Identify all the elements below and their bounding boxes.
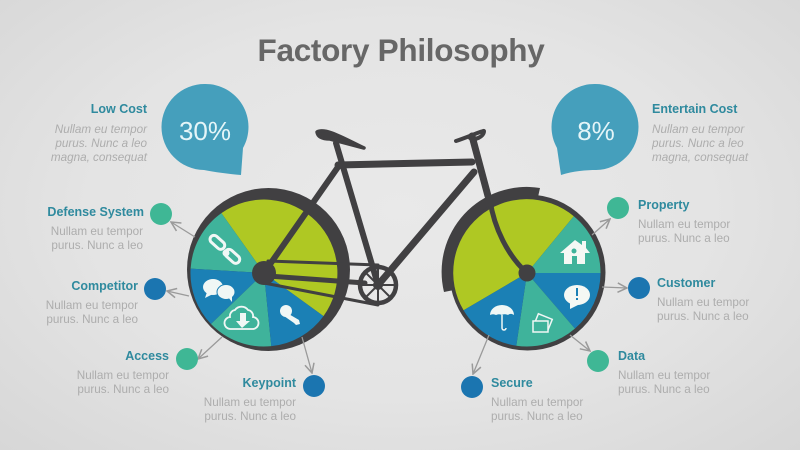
right wheel blue sector: alert bbox=[527, 273, 600, 329]
text block: keypoint: purus. Nunc a leo bbox=[204, 410, 296, 423]
text block: entertain cost: Nullam eu tempor bbox=[652, 123, 745, 136]
text block: customer: Nullam eu tempor bbox=[657, 296, 749, 309]
right hub bbox=[518, 264, 536, 282]
right wheel fender bbox=[442, 187, 540, 292]
text block: low cost bbox=[51, 102, 148, 164]
crank ring bbox=[360, 267, 396, 303]
text block: property bbox=[638, 198, 730, 245]
arrows bbox=[167, 219, 627, 374]
text block: competitor: Nullam eu tempor bbox=[46, 299, 138, 312]
text block: entertain cost: purus. Nunc a leo bbox=[651, 137, 744, 150]
icon: link bbox=[208, 234, 241, 265]
left hub bbox=[252, 261, 276, 285]
icon: cloud download bbox=[224, 307, 259, 329]
head tube and fork bbox=[472, 136, 488, 196]
text block: data bbox=[618, 349, 710, 396]
text block: entertain cost: Entertain Cost bbox=[652, 102, 738, 116]
left wheel blue sector: chat bbox=[190, 269, 264, 324]
right wheel teal sector: photos bbox=[516, 273, 575, 346]
dot: defense system bbox=[150, 203, 172, 225]
text block: competitor bbox=[46, 279, 138, 326]
chain stays bbox=[264, 261, 378, 305]
left wheel teal sector: link bbox=[191, 213, 264, 273]
right wheel blue sector: umbrella bbox=[464, 273, 527, 346]
text block: entertain cost: magna, consequat bbox=[652, 151, 749, 164]
text block: entertain cost bbox=[651, 102, 749, 164]
text block: secure: Secure bbox=[491, 376, 533, 390]
left wheel bbox=[187, 188, 350, 351]
text block: keypoint bbox=[204, 376, 297, 423]
saddle bbox=[317, 131, 364, 148]
text block: keypoint: Nullam eu tempor bbox=[204, 396, 296, 409]
callout: low cost 30% bbox=[161, 84, 248, 175]
text block: low cost: Nullam eu tempor bbox=[55, 123, 148, 136]
left wheel teal sector: cloud bbox=[211, 273, 271, 346]
right wheel bbox=[442, 187, 606, 350]
right wheel teal sector: house bbox=[527, 216, 601, 273]
text block: customer: Customer bbox=[657, 276, 715, 290]
text block: secure: Nullam eu tempor bbox=[491, 396, 583, 409]
dot: competitor bbox=[144, 278, 166, 300]
dot: keypoint bbox=[303, 375, 325, 397]
text block: competitor: Competitor bbox=[71, 279, 138, 293]
text block: defense system bbox=[47, 205, 144, 252]
text block: low cost: magna, consequat bbox=[51, 151, 148, 164]
top tube bbox=[338, 162, 472, 165]
right wheel green sector bbox=[453, 199, 574, 310]
text block: secure bbox=[491, 376, 583, 423]
text block: access bbox=[77, 349, 169, 396]
dot: data bbox=[587, 350, 609, 372]
dot: secure bbox=[461, 376, 483, 398]
dot: access bbox=[176, 348, 198, 370]
text block: access: Nullam eu tempor bbox=[77, 369, 169, 382]
right wheel tire bbox=[450, 194, 606, 350]
bicycle frame bbox=[264, 131, 527, 305]
down tube bbox=[378, 172, 474, 285]
text block: property: Property bbox=[638, 198, 689, 212]
text block: customer bbox=[657, 276, 749, 323]
text block: property: purus. Nunc a leo bbox=[638, 232, 730, 245]
text block: access: purus. Nunc a leo bbox=[77, 383, 169, 396]
icon: alert bubble bbox=[564, 285, 590, 309]
icon: chat bubbles bbox=[203, 279, 235, 302]
text block: data: purus. Nunc a leo bbox=[618, 383, 710, 396]
icon: house bbox=[560, 240, 590, 264]
left wheel tire bbox=[187, 188, 350, 351]
callout: entertain cost 8%: 8% bbox=[577, 116, 615, 146]
text block: access: Access bbox=[125, 349, 169, 363]
left wheel green sector bbox=[221, 200, 337, 316]
callout: low cost 30%: 30% bbox=[179, 116, 231, 146]
text block: property: Nullam eu tempor bbox=[638, 218, 730, 231]
seat stay bbox=[266, 167, 338, 270]
dot: property bbox=[607, 197, 629, 219]
text block: data: Data bbox=[618, 349, 646, 363]
text block: keypoint: Keypoint bbox=[243, 376, 297, 390]
text block: defense system: Nullam eu tempor bbox=[51, 225, 143, 238]
icon: key bbox=[280, 305, 300, 325]
text block: competitor: purus. Nunc a leo bbox=[46, 313, 138, 326]
icon: photos bbox=[533, 314, 552, 332]
icon: umbrella bbox=[490, 305, 514, 330]
seat tube bbox=[336, 143, 378, 285]
text block: secure: purus. Nunc a leo bbox=[491, 410, 583, 423]
title: Factory Philosophy bbox=[258, 32, 545, 68]
handlebar bbox=[456, 131, 484, 141]
text block: defense system: purus. Nunc a leo bbox=[51, 239, 143, 252]
text block: low cost: purus. Nunc a leo bbox=[54, 137, 147, 150]
dot: customer bbox=[628, 277, 650, 299]
text block: customer: purus. Nunc a leo bbox=[657, 310, 749, 323]
callout: entertain cost 8% bbox=[552, 84, 639, 175]
left wheel blue sector: key bbox=[264, 273, 324, 346]
text block: low cost: Low Cost bbox=[91, 102, 148, 116]
text block: data: Nullam eu tempor bbox=[618, 369, 710, 382]
text block: defense system: Defense System bbox=[47, 205, 144, 219]
